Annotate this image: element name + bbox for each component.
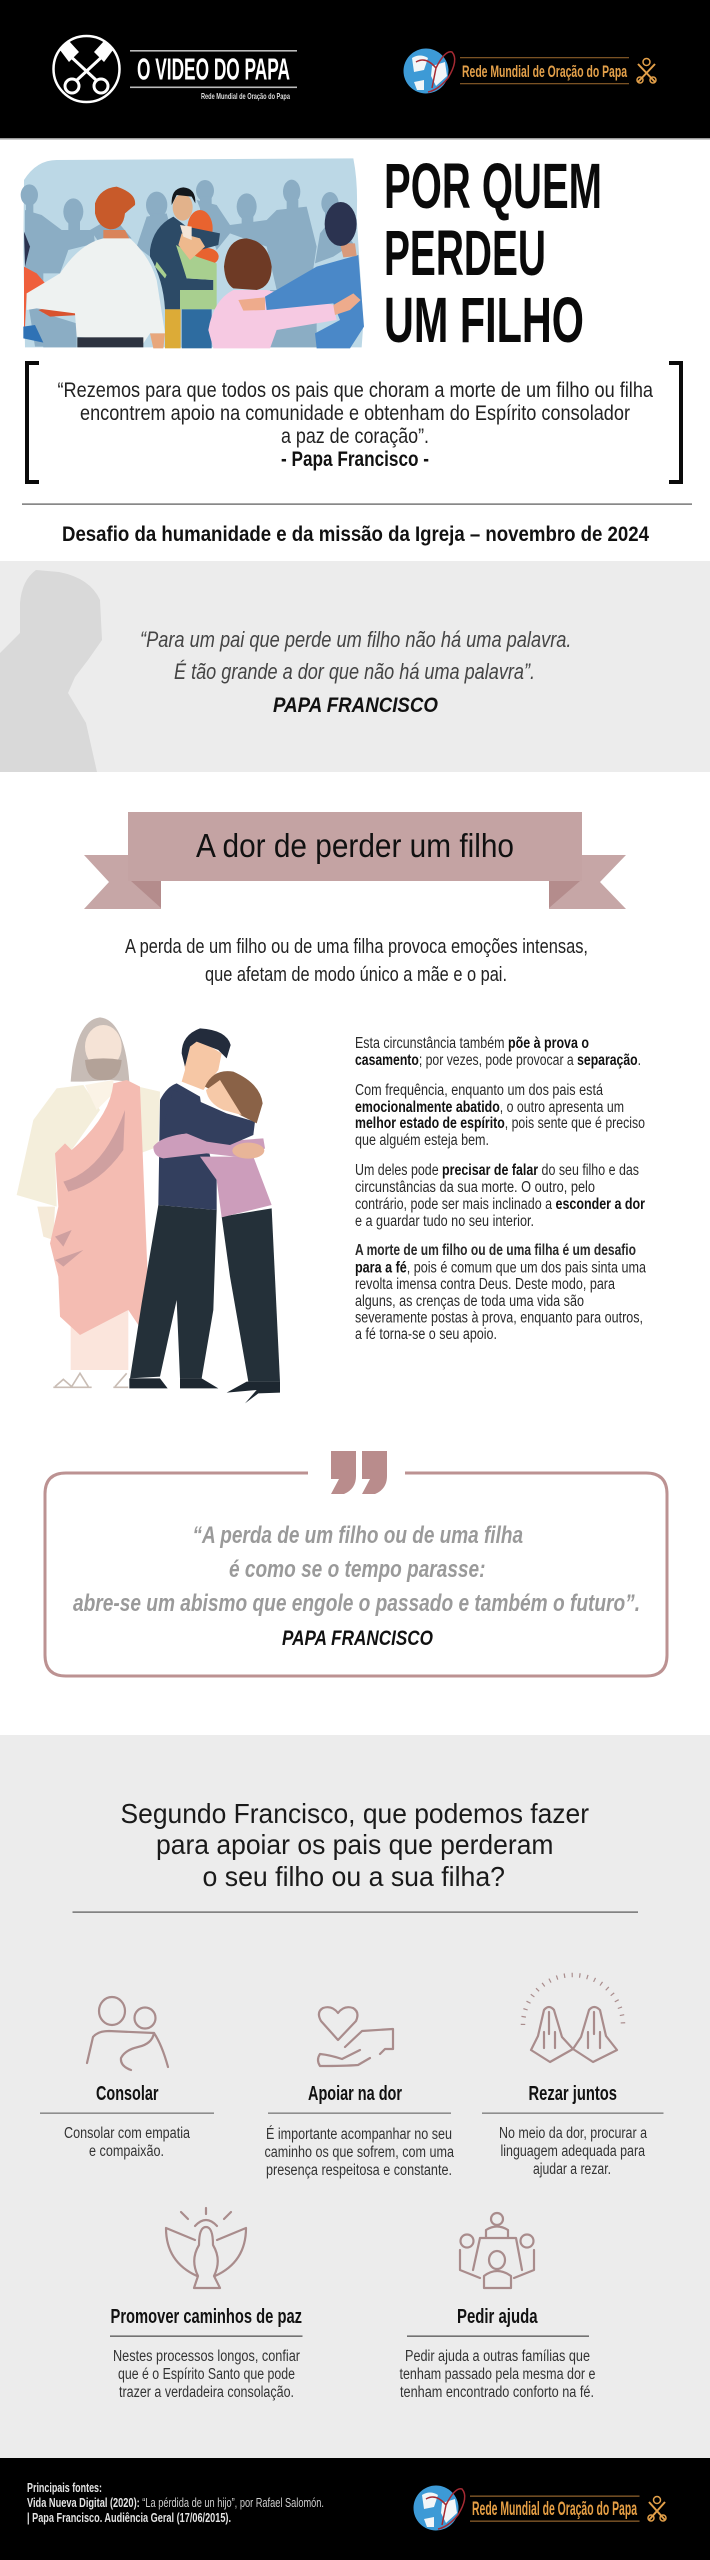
card: Pedir ajuda: tenham encontrado conforto na fé.	[400, 2384, 594, 2401]
card: Consolar: Consolar	[96, 2083, 159, 2105]
card: Apoiar na dor	[264, 2007, 454, 2179]
card: Rezar juntos	[482, 1975, 664, 2178]
title: UM FILHO	[384, 284, 584, 356]
heading: o seu filho ou a sua filha?	[202, 1861, 505, 1892]
intention quote with brackets: a paz de coração”.	[281, 425, 429, 448]
heading: Segundo Francisco, que podemos fazer	[120, 1798, 589, 1829]
sources	[27, 2480, 324, 2525]
card: Consolar	[40, 1997, 214, 2160]
panel: pope quote on grey band	[0, 561, 710, 772]
card: Rezar juntos: ajudar a rezar.	[533, 2161, 611, 2178]
icon: quotation marks	[331, 1451, 387, 1494]
header band	[0, 0, 710, 140]
card: Pedir ajuda: tenham passado pela mesma dor e	[400, 2366, 596, 2383]
card: Apoiar na dor: caminho os que sofrem, com uma	[264, 2144, 454, 2161]
intention quote with brackets: - Papa Francisco -	[281, 448, 429, 471]
icon: embrace	[87, 1997, 168, 2070]
illustration: community embracing grieving parents	[21, 158, 364, 348]
card: Promover caminhos de paz	[110, 2208, 302, 2401]
card: Promover caminhos de paz: que é o Espírito Santo que pode	[118, 2366, 295, 2383]
panel: framed quote: “A perda de um filho ou de uma filha	[192, 1522, 523, 1549]
logo: Rede Mundial de Oração do Papa	[414, 2486, 666, 2530]
card: Rezar juntos: No meio da dor, procurar a	[499, 2125, 647, 2142]
logo: O Video do Papa: Rede Mundial de Oração do Papa	[201, 91, 290, 101]
card: Consolar: Consolar com empatia	[64, 2125, 190, 2142]
text block: effects on the couple: melhor estado de espírito, pois sente que é preciso	[355, 1115, 645, 1132]
heading ribbon: A dor de perder um filho	[84, 812, 626, 909]
card: Pedir ajuda: Pedir ajuda a outras famílias que	[405, 2348, 590, 2365]
card: Apoiar na dor: É importante acompanhar no seu	[266, 2126, 452, 2143]
intro text: A perda de um filho ou de uma filha provoca emoções intensas,	[125, 936, 588, 958]
text block: effects on the couple: emocionalmente abatido, o outro apresenta um	[355, 1099, 624, 1116]
logo: O Video do Papa	[54, 36, 297, 102]
heading ribbon: A dor de perder um filho: A dor de perder um filho	[196, 827, 514, 864]
panel: what we can do	[0, 1735, 710, 2458]
title: PERDEU	[384, 217, 546, 289]
text block: effects on the couple: Esta circunstância também põe à prova o	[355, 1035, 589, 1052]
icon: heart over hand	[318, 2007, 393, 2066]
intro text	[125, 936, 588, 986]
panel: pope quote on grey band: “Para um pai que perde um filho não há uma palavra.	[140, 627, 572, 652]
text block: effects on the couple: a fé torna-se o seu apoio.	[355, 1326, 497, 1343]
subtitle: monthly challenge: Desafio da humanidade e da missão da Igreja – novembro de 2024	[62, 523, 649, 546]
text block: effects on the couple: Com frequência, enquanto um dos pais está	[355, 1082, 603, 1099]
intention quote with brackets: encontrem apoio na comunidade e obtenham do Espírito consolador	[80, 402, 630, 425]
text block: effects on the couple: A morte de um filho ou de uma filha é um desafio	[355, 1242, 636, 1259]
logo: Rede Mundial de Oração do Papa	[404, 48, 656, 94]
text block: effects on the couple: circunstâncias da sua morte. O outro, pelo	[355, 1179, 595, 1196]
panel: framed quote: PAPA FRANCISCO	[282, 1627, 433, 1650]
card: Consolar: e compaixão.	[89, 2143, 164, 2160]
text block: effects on the couple: Um deles pode precisar de falar do seu filho e das	[355, 1162, 639, 1179]
sources: Principais fontes:	[27, 2480, 102, 2495]
panel: framed quote	[45, 1451, 667, 1676]
title	[384, 150, 602, 356]
panel: framed quote: é como se o tempo parasse:	[229, 1556, 486, 1583]
card: Promover caminhos de paz: trazer a verdadeira consolação.	[119, 2384, 294, 2401]
sources: Vida Nueva Digital (2020): “La pérdida de un hijo”, por Rafael Salomón.	[27, 2495, 324, 2510]
card: Pedir ajuda	[400, 2213, 596, 2401]
text block: effects on the couple: severamente postas à prova, enquanto para outros,	[355, 1310, 643, 1326]
text block: effects on the couple	[355, 1035, 646, 1343]
text block: effects on the couple: alguns, as crenças de toda uma vida são	[355, 1293, 584, 1310]
illustration: Jesus beside embracing parents	[17, 1017, 280, 1403]
card: Promover caminhos de paz: Promover caminhos de paz	[110, 2306, 302, 2328]
card: Rezar juntos: Rezar juntos	[528, 2083, 617, 2105]
icon: dove of the Holy Spirit	[166, 2208, 246, 2288]
footer band	[0, 2458, 710, 2560]
text block: effects on the couple: contrário, pode ser mais inclinado a esconder a dor	[355, 1196, 645, 1213]
text block: effects on the couple: para a fé, pois é comum que um dos pais sinta uma	[355, 1260, 646, 1276]
heading: para apoiar os pais que perderam	[156, 1829, 554, 1860]
panel: pope quote on grey band: PAPA FRANCISCO	[273, 694, 438, 717]
intro text: que afetam de modo único a mãe e o pai.	[205, 964, 507, 986]
text block: effects on the couple: e a guardar tudo no seu interior.	[355, 1213, 534, 1230]
panel: pope quote on grey band: É tão grande a dor que não há uma palavra”.	[174, 659, 535, 684]
card: Pedir ajuda: Pedir ajuda	[457, 2306, 538, 2328]
card: Promover caminhos de paz: Nestes processos longos, confiar	[113, 2348, 300, 2365]
text block: effects on the couple: que alguém esteja bem.	[355, 1132, 489, 1149]
card: Apoiar na dor: presença respeitosa e constante.	[266, 2162, 452, 2179]
card: Rezar juntos: linguagem adequada para	[500, 2143, 645, 2160]
text block: effects on the couple: casamento; por vezes, pode provocar a separação.	[355, 1052, 641, 1069]
icon: pope silhouette	[0, 570, 102, 772]
logo: O Video do Papa: O VIDEO DO PAPA	[137, 52, 290, 86]
sources: | Papa Francisco. Audiência Geral (17/06/2015).	[27, 2510, 231, 2525]
heading	[120, 1798, 589, 1892]
icon: support group around a table	[460, 2213, 534, 2288]
intention quote with brackets	[27, 363, 681, 482]
card: Apoiar na dor: Apoiar na dor	[308, 2083, 402, 2105]
icon: praying hands	[523, 1975, 623, 2062]
text block: effects on the couple: revolta imensa contra Deus. Deste modo, para	[355, 1276, 615, 1293]
